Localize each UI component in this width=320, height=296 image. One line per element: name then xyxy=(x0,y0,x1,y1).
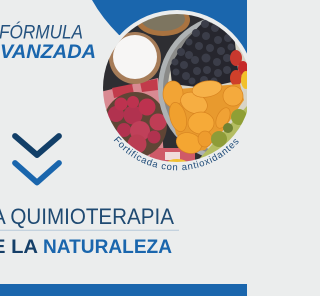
background xyxy=(0,0,247,296)
heading: de la naturaleza: NATURALEZA xyxy=(43,237,172,258)
photo ring xyxy=(99,10,255,166)
raspberry bowl xyxy=(103,92,167,158)
heading: formula: FÓRMULA xyxy=(0,22,83,44)
kiwi xyxy=(200,106,247,158)
gingham cloth xyxy=(103,78,164,157)
strawberries xyxy=(230,50,242,66)
kiwi slices xyxy=(231,109,247,125)
mandarin segments xyxy=(163,79,244,157)
divider xyxy=(0,229,179,232)
raspberries xyxy=(108,96,166,154)
blue corner shape xyxy=(92,0,247,60)
heading: avanzada: VANZADA xyxy=(0,42,96,63)
icon: double chevron xyxy=(15,136,59,182)
yellow fruit xyxy=(168,159,186,162)
blueberries xyxy=(170,20,238,88)
bottom bar xyxy=(0,284,247,296)
white powder bowl xyxy=(109,32,161,84)
plate xyxy=(158,19,212,156)
chia bowl xyxy=(138,14,190,36)
curved caption: Fortificada con antioxidantes xyxy=(114,136,238,170)
circular food photo xyxy=(103,14,247,162)
